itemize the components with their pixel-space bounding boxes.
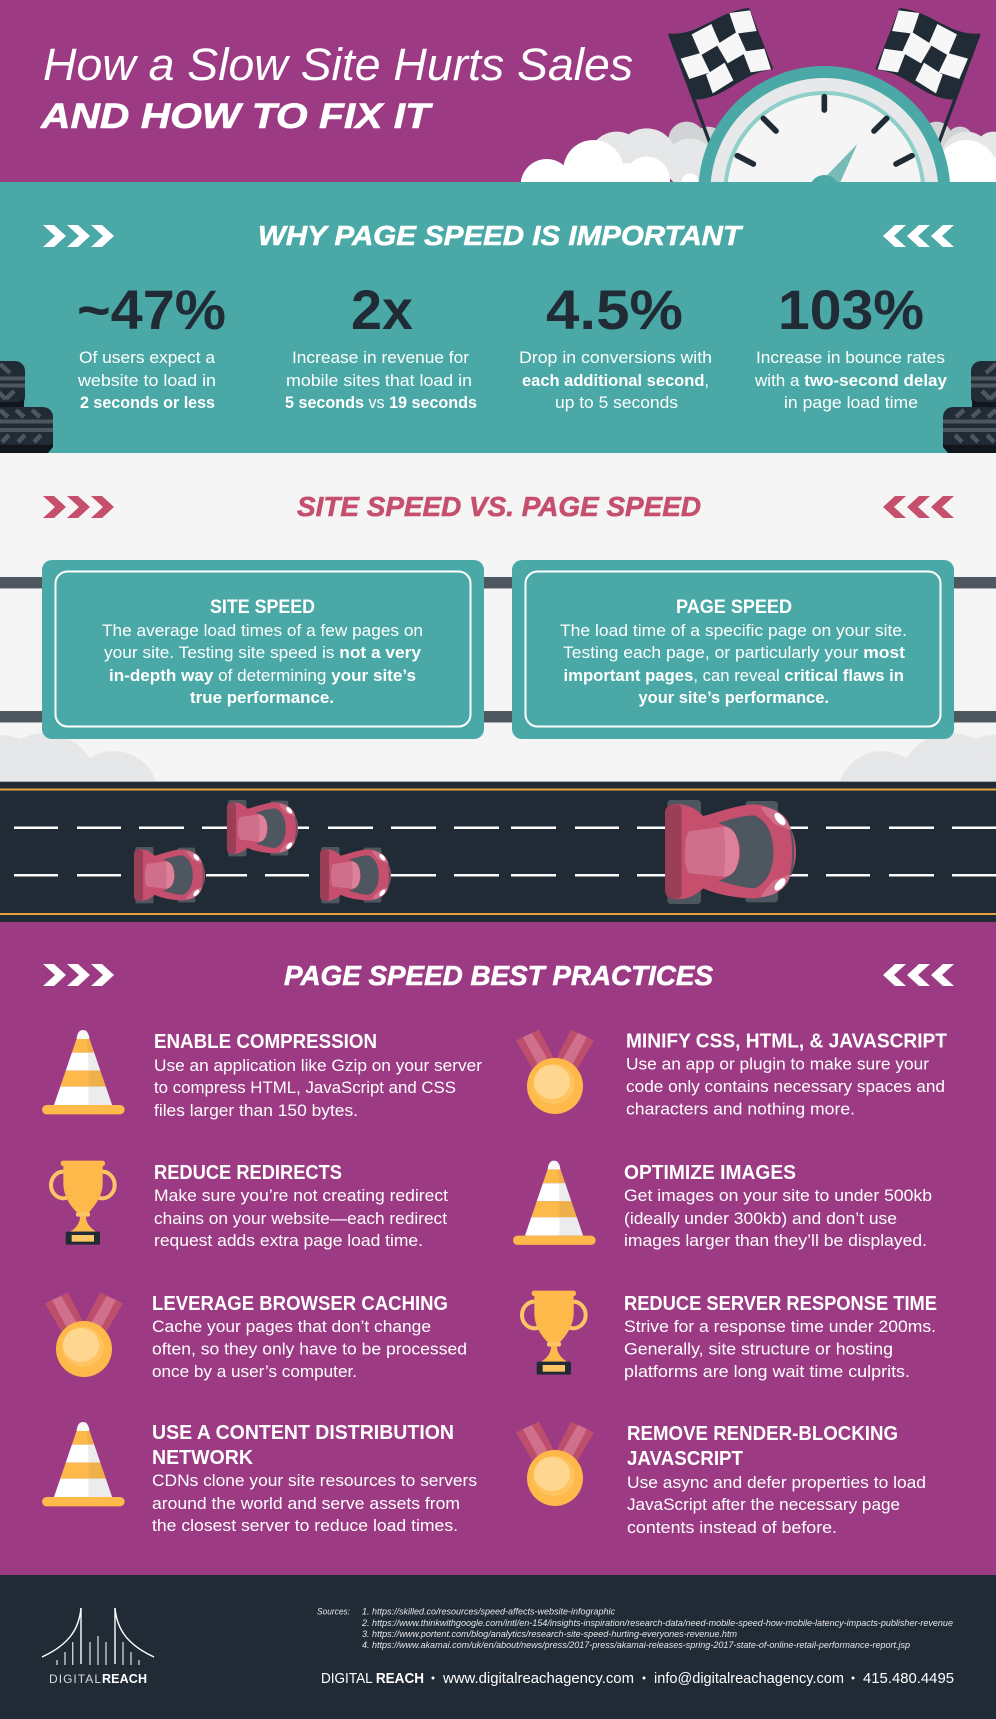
heading: WHY PAGE SPEED IS IMPORTANT — [258, 220, 743, 251]
item: content distribution network: CDNs clone your site resources to servers — [152, 1471, 477, 1490]
item: reduce server response time: Strive for a response time under 200ms. — [624, 1317, 936, 1336]
arrows: left chevrons — [43, 496, 114, 518]
stat: 103 percent: with a two-second delay — [754, 371, 948, 390]
item: minify: characters and nothing more. — [626, 1100, 855, 1118]
icon: cone — [42, 1422, 125, 1506]
item: optimize images: images larger than they’ll be displayed. — [624, 1231, 927, 1250]
sign posts — [0, 577, 996, 723]
item: optimize images: (ideally under 300kb) and don’t use — [624, 1209, 897, 1228]
stat: 4.5 percent: each additional second, — [522, 371, 709, 390]
item: remove render-blocking javascript: JAVASCRIPT — [627, 1447, 743, 1470]
panel: page speed best practices — [0, 922, 996, 1575]
stat: 2x: 2x — [351, 278, 413, 341]
heading: SITE SPEED VS. PAGE SPEED — [297, 491, 701, 522]
icon: medal — [516, 1422, 594, 1506]
item: remove render-blocking javascript: REMOVE RENDER-BLOCKING — [627, 1422, 898, 1445]
title: AND HOW TO FIX IT — [40, 97, 433, 136]
stat: 2x: 5 seconds vs 19 seconds — [285, 393, 477, 412]
sign: page speed: The load time of a specific page on your site. — [560, 621, 907, 640]
item: content distribution network: USE A CONTENT DISTRIBUTION — [152, 1421, 454, 1444]
item: reduce server response time: REDUCE SERVER RESPONSE TIME — [624, 1292, 937, 1315]
item: reduce redirects: Make sure you’re not creating redirect — [154, 1186, 448, 1205]
car: top small — [227, 800, 298, 856]
arrows: left chevrons — [43, 964, 114, 986]
stat: 2x: mobile sites that load in — [286, 371, 472, 390]
icon: right checkered flag — [877, 9, 979, 143]
item: optimize images — [624, 1161, 932, 1250]
item: enable compression: Use an application like Gzip on your server — [154, 1056, 482, 1075]
sign: page speed: Testing each page, or particularly your most — [563, 643, 905, 662]
item: remove render-blocking javascript: contents instead of before. — [627, 1518, 837, 1537]
item: content distribution network: NETWORK — [152, 1446, 253, 1469]
sources: 1. https://skilled.co/resources/speed-affects-website-infographic — [362, 1607, 615, 1617]
clouds behind signs — [0, 733, 996, 845]
clouds — [521, 122, 996, 211]
icon: trophy — [522, 1291, 586, 1375]
item: minify: code only contains necessary spaces and — [626, 1077, 945, 1096]
item: leverage browser caching: often, so they only have to be processed — [152, 1340, 467, 1358]
contact line: DIGITAL REACH — [321, 1670, 424, 1687]
icon: speedometer — [698, 66, 950, 318]
icon: cone — [42, 1030, 125, 1114]
illustration: clouds, flags and speedometer — [521, 9, 996, 318]
stat: 47 percent: website to load in — [77, 371, 216, 390]
item: reduce server response time: Generally, site structure or hosting — [624, 1340, 893, 1358]
item: enable compression: files larger than 150 bytes. — [154, 1101, 358, 1120]
item: enable compression: to compress HTML, JavaScript and CSS — [154, 1078, 456, 1097]
arrows: right chevrons — [883, 964, 954, 986]
sources: 4. https://www.akamai.com/uk/en/about/news/press/2017-press/akamai-releases-spring-2017-state-of-online-retail-performance-report.jsp — [362, 1640, 910, 1650]
contact line: www.digitalreachagency.com — [442, 1670, 634, 1687]
item: reduce redirects: REDUCE REDIRECTS — [154, 1161, 342, 1184]
item: content distribution network: the closest server to reduce load times. — [152, 1516, 458, 1535]
sign: site speed: SITE SPEED — [210, 597, 315, 618]
icon: medal — [45, 1292, 123, 1377]
item: optimize images: OPTIMIZE IMAGES — [624, 1161, 796, 1184]
sign: page speed — [512, 560, 954, 739]
arrows: left chevrons — [43, 225, 114, 247]
stat: 103 percent: Increase in bounce rates — [756, 348, 945, 367]
item: content distribution network: around the world and serve assets from — [152, 1494, 460, 1513]
arrows: right chevrons — [883, 496, 954, 518]
item: leverage browser caching: LEVERAGE BROWSER CACHING — [152, 1292, 448, 1315]
item: minify: MINIFY CSS, HTML, & JAVASCRIPT — [626, 1030, 947, 1052]
logo: digital reach bridge — [42, 1608, 154, 1686]
panel: road with race cars — [0, 781, 996, 922]
sign: site speed — [42, 560, 484, 739]
contact line: info@digitalreachagency.com — [654, 1670, 844, 1687]
item: reduce redirects: chains on your website—each redirect — [154, 1209, 447, 1228]
item: minify — [626, 1030, 947, 1118]
stat: 47 percent — [77, 278, 226, 412]
stat: 103 percent — [754, 278, 948, 412]
stat: 2x: Increase in revenue for — [292, 348, 469, 367]
stat: 4.5 percent: up to 5 seconds — [555, 393, 678, 412]
sign: site speed: in-depth way of determining your site’s — [109, 666, 416, 685]
item: remove render-blocking javascript — [627, 1422, 926, 1537]
heading: PAGE SPEED BEST PRACTICES — [284, 960, 714, 991]
stat: 47 percent: Of users expect a — [79, 348, 216, 367]
sources: 2. https://www.thinkwithgoogle.com/intl/en-154/insights-inspiration/research-data/need-mobile-speed-how-mobile-latency-impacts-publisher-revenue — [361, 1618, 953, 1628]
item: leverage browser caching — [152, 1292, 467, 1381]
item: enable compression — [154, 1030, 482, 1120]
sources: Sources: — [317, 1607, 350, 1617]
sources: 3. https://www.portent.com/blog/analytics/research-site-speed-hurting-everyones-revenue.htm — [362, 1629, 737, 1639]
sign: page speed: PAGE SPEED — [676, 597, 792, 618]
sign: page speed: your site’s performance. — [638, 688, 829, 707]
sources — [317, 1607, 953, 1650]
item: optimize images: Get images on your site to under 500kb — [624, 1186, 932, 1205]
icon: left checkered flag — [670, 9, 772, 143]
item: remove render-blocking javascript: JavaScript after the necessary page — [627, 1495, 900, 1514]
item: reduce server response time — [624, 1292, 937, 1381]
icon: medal — [516, 1030, 594, 1114]
logo: digital reach bridge: REACH — [102, 1672, 147, 1686]
item: leverage browser caching: once by a user’s computer. — [152, 1362, 357, 1381]
sign: site speed: your site. Testing site speed is not a very — [104, 643, 422, 662]
item: reduce redirects — [154, 1161, 448, 1250]
stat: 47 percent: 2 seconds or less — [80, 393, 215, 412]
title — [40, 39, 633, 136]
stat: 2x — [285, 278, 477, 412]
arrows: right chevrons — [883, 225, 954, 247]
stat: 4.5 percent: 4.5% — [546, 278, 683, 341]
stat: 4.5 percent — [519, 278, 712, 412]
item: enable compression: ENABLE COMPRESSION — [154, 1030, 377, 1053]
item: content distribution network — [152, 1421, 477, 1535]
contact line — [321, 1670, 954, 1687]
stat: 103 percent: 103% — [778, 278, 924, 341]
stat: 47 percent: ~47% — [77, 278, 226, 341]
item: leverage browser caching: Cache your pages that don’t change — [152, 1317, 431, 1336]
car: lower left small — [134, 847, 205, 903]
contact line: 415.480.4495 — [863, 1670, 954, 1687]
sign: site speed: true performance. — [190, 688, 334, 707]
icon: stacked tires left — [0, 361, 53, 453]
car: lower middle small — [320, 847, 391, 903]
sign: page speed: important pages, can reveal critical flaws in — [564, 666, 904, 685]
panel: why page speed is important — [0, 182, 996, 453]
item: reduce server response time: platforms are long wait time culprits. — [624, 1362, 910, 1381]
sign: site speed: The average load times of a few pages on — [102, 621, 423, 640]
icon: trophy — [51, 1161, 115, 1245]
car: large — [665, 800, 796, 904]
item: reduce redirects: request adds extra page load time. — [154, 1231, 423, 1250]
logo: digital reach bridge: DIGITAL — [49, 1672, 101, 1686]
icon: stacked tires right — [943, 361, 996, 453]
panel: site speed vs page speed — [0, 453, 996, 845]
title: How a Slow Site Hurts Sales — [43, 39, 633, 90]
item: remove render-blocking javascript: Use async and defer properties to load — [627, 1473, 926, 1492]
icon: cone — [513, 1161, 596, 1245]
stat: 103 percent: in page load time — [784, 393, 918, 412]
panel: footer — [0, 1575, 996, 1719]
panel: header — [0, 0, 996, 318]
stat: 4.5 percent: Drop in conversions with — [519, 348, 712, 367]
item: minify: Use an app or plugin to make sure your — [626, 1055, 929, 1074]
